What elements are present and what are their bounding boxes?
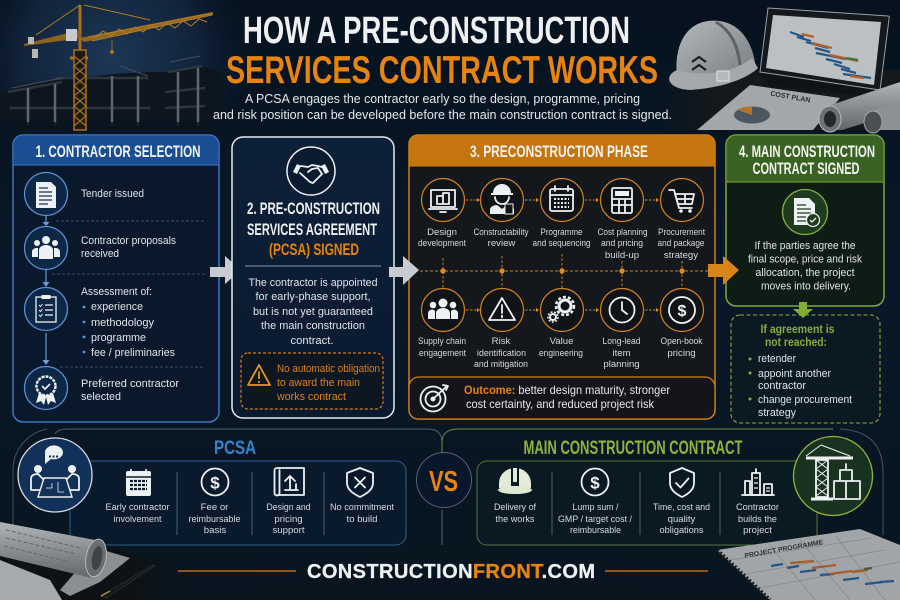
photo: rolled drawings and pen <box>0 522 190 600</box>
header photo: hard hat, laptop, cost plan and drawings: COST PLAN <box>770 91 811 104</box>
icon: calculator <box>600 178 644 222</box>
arrow: step 2 to step 3 <box>389 256 419 285</box>
item: contractor builds the project <box>736 469 780 536</box>
panel: 2. PCSA signed <box>232 137 394 418</box>
icon: calendar <box>540 178 584 222</box>
label: supply chain engagement: Supply chain <box>418 336 466 347</box>
step text: contractor proposals received: received <box>81 248 119 260</box>
step text: assessment criteria: fee / preliminaries <box>91 347 176 359</box>
callout: outcome: cost certainty, and reduced project risk <box>466 397 654 411</box>
panel: main construction contract comparison <box>442 429 883 545</box>
timeline connector <box>415 198 708 312</box>
callout: outcome: Outcome: better design maturity, stronger <box>464 383 670 397</box>
item: contractor builds the project: builds the <box>738 514 777 525</box>
label: risk identification and mitigation: and mitigation <box>474 359 528 370</box>
step text: preferred contractor selected <box>81 378 179 403</box>
icon: clock <box>600 288 644 332</box>
item: no commitment to build: to build <box>347 514 377 525</box>
step text: preferred contractor selected: selected <box>81 391 121 403</box>
step text: tender issued: Tender issued <box>81 188 144 200</box>
heading: PCSA signed: 2. PRE-CONSTRUCTION <box>247 200 380 218</box>
label: risk identification and mitigation: Risk <box>492 336 511 347</box>
panel: 4. main construction contract signed <box>726 135 884 306</box>
photo: project programme notebook: PROJECT PROGRAMME <box>744 539 824 560</box>
item: fee or reimbursable basis: reimbursable <box>188 514 240 525</box>
label: programme and sequencing: and sequencing <box>532 238 590 249</box>
text: appointment explanation <box>248 277 378 347</box>
item: fee or reimbursable basis: basis <box>204 525 226 536</box>
step text: assessment criteria: programme <box>91 332 146 344</box>
label: procurement and package strategy: and package <box>658 238 704 249</box>
panel: 3. preconstruction phase <box>409 135 715 419</box>
text: moves into delivery: final scope, price and risk <box>748 254 862 266</box>
icon: people <box>24 226 68 270</box>
item: fee or reimbursable basis <box>188 468 240 536</box>
icon: signed contract <box>782 190 828 234</box>
step text: preferred contractor selected: Preferred contractor <box>81 378 179 390</box>
icon: risk warning <box>480 288 524 332</box>
label: risk identification and mitigation: identification <box>477 348 526 359</box>
callout: no automatic obligation: No automatic obligation <box>277 363 380 375</box>
step text: assessment criteria <box>81 286 176 359</box>
icon: supply chain people <box>422 288 464 332</box>
label: long-lead item planning <box>602 336 640 370</box>
icon: tender document <box>24 172 68 216</box>
label: long-lead item planning: item <box>612 348 631 359</box>
text: moves into delivery: allocation, the project <box>756 267 855 279</box>
text: appointment explanation: the main construction <box>261 320 365 332</box>
item: fee or reimbursable basis: $ <box>210 474 220 492</box>
callout: no automatic obligation: works contract <box>276 391 346 403</box>
text: moves into delivery: If the parties agree the <box>754 240 856 252</box>
label: constructability review: Constructability <box>474 227 529 238</box>
callout: no automatic obligation <box>241 353 383 409</box>
text: moves into delivery <box>748 240 862 292</box>
callout: if agreement is not reached: change procurement <box>758 394 852 406</box>
label: design development: Design <box>427 227 457 238</box>
VS badge: VS <box>429 466 458 498</box>
item: fee or reimbursable basis: Fee or <box>201 502 229 513</box>
icon: meeting over plans <box>18 438 92 512</box>
item: lump sum pricing options: $ <box>590 474 600 492</box>
header photo: crane and building under construction <box>0 0 270 130</box>
title: SERVICES CONTRACT WORKS <box>226 49 658 92</box>
step text: assessment criteria: Assessment of: <box>81 286 152 298</box>
icon: assessment clipboard <box>24 288 68 330</box>
step text: contractor proposals received: Contractor proposals <box>81 235 177 247</box>
label: supply chain engagement <box>418 336 466 359</box>
title: HOW A PRE-CONSTRUCTION <box>243 10 630 52</box>
label: procurement and package strategy: strategy <box>664 250 698 261</box>
callout: if agreement is not reached: retender <box>758 353 796 365</box>
item: lump sum pricing options: reimbursable <box>570 525 621 536</box>
label: supply chain engagement: engagement <box>419 348 466 359</box>
arrow: down to fallback <box>793 302 813 318</box>
heading: PCSA signed: SERVICES AGREEMENT <box>247 221 377 239</box>
item: design and pricing support: Design and <box>266 502 310 513</box>
text: appointment explanation: The contractor is appointed <box>248 277 378 289</box>
callout: if agreement is not reached: not reached: <box>765 335 827 349</box>
panel: 1. contractor selection <box>13 135 219 422</box>
subtitle: and risk position can be developed before the main construction contract is signed. <box>213 107 672 122</box>
VS badge <box>416 452 472 545</box>
callout: outcome <box>409 377 715 419</box>
label: cost planning and pricing build-up: and pricing <box>601 238 643 249</box>
step text: contractor proposals received <box>81 235 177 260</box>
text: moves into delivery: moves into delivery. <box>761 280 851 292</box>
icon: design development <box>422 178 464 222</box>
icon: shopping cart <box>660 178 704 222</box>
icon: target <box>420 385 448 412</box>
label: value engineering: engineering <box>539 348 583 359</box>
label: procurement and package strategy: Procurement <box>658 227 705 238</box>
label: value engineering: Value <box>550 336 573 347</box>
footer brand: CONSTRUCTIONFRONT.COM <box>307 561 595 583</box>
item: design and pricing support: support <box>272 525 305 536</box>
item: contractor builds the project: project <box>743 525 772 536</box>
callout: if agreement is not reached: appoint another <box>758 368 831 380</box>
item: lump sum pricing options: Lump sum / <box>572 502 619 513</box>
label: cost planning and pricing build-up: build-up <box>605 250 639 261</box>
callout: if agreement is not reached <box>731 315 880 423</box>
label: open-book pricing: pricing <box>667 348 696 359</box>
label: cost planning and pricing build-up <box>598 227 648 261</box>
item: no commitment to build <box>330 468 394 525</box>
panel: PCSA comparison <box>13 429 442 545</box>
label: long-lead item planning: Long-lead <box>602 336 640 347</box>
item: time, cost and quality obligations: Time, cost and <box>653 502 710 513</box>
label: constructability review <box>474 227 529 249</box>
label: constructability review: review <box>488 238 515 249</box>
arrow: step 1 to step 2 <box>210 256 241 284</box>
item: contractor builds the project: Contractor <box>736 502 780 513</box>
heading: PCSA: PCSA <box>214 438 256 459</box>
icon: crane and building <box>794 436 872 516</box>
item: delivery of the works: the works <box>496 514 535 525</box>
item: no commitment to build: No commitment <box>330 502 394 513</box>
label: programme and sequencing: Programme <box>540 227 582 238</box>
icon: handshake <box>287 147 335 195</box>
text: appointment explanation: for early-phase support, <box>256 291 370 303</box>
label: open-book pricing: Open-book <box>660 336 703 347</box>
label: design development <box>418 227 466 249</box>
icon: open-book pricing: $ <box>678 303 687 320</box>
icon: open-book pricing <box>660 288 704 332</box>
icon: gears <box>540 288 584 332</box>
label: procurement and package strategy <box>658 227 705 261</box>
callout: if agreement is not reached: contractor <box>758 380 806 392</box>
item: early contractor involvement <box>106 469 170 525</box>
heading: PCSA signed: (PCSA) SIGNED <box>269 241 359 259</box>
label: programme and sequencing <box>532 227 590 249</box>
subtitle <box>213 91 672 122</box>
icon: warning triangle <box>248 365 270 385</box>
label: value engineering <box>539 336 583 359</box>
item: lump sum pricing options <box>558 468 632 536</box>
callout: no automatic obligation: to award the main <box>277 377 360 389</box>
text: appointment explanation: contract. <box>290 335 334 347</box>
item: time, cost and quality obligations: obligations <box>660 525 704 536</box>
callout: if agreement is not reached: strategy <box>758 407 797 419</box>
label: open-book pricing <box>660 336 703 359</box>
label: long-lead item planning: planning <box>603 359 640 370</box>
heading: PCSA signed <box>247 200 380 259</box>
text: appointment explanation: but is not yet guaranteed <box>253 306 373 318</box>
heading: main construction contract signed <box>739 143 875 178</box>
heading: contractor selection: 1. CONTRACTOR SELECTION <box>36 142 200 161</box>
item: early contractor involvement: Early contractor <box>106 502 170 513</box>
callout: if agreement is not reached: If agreement is <box>760 322 835 336</box>
heading: main construction contract: MAIN CONSTRUCTION CONTRACT <box>524 438 743 459</box>
subtitle: A PCSA engages the contractor early so the design, programme, pricing <box>245 91 640 106</box>
title <box>226 10 658 92</box>
step text: assessment criteria: experience <box>91 301 143 313</box>
item: early contractor involvement: involvement <box>114 514 162 525</box>
icon: constructability review <box>480 178 524 222</box>
item: design and pricing support <box>266 468 310 536</box>
item: delivery of the works: Delivery of <box>494 502 536 513</box>
icon: rosette <box>24 366 68 410</box>
label: cost planning and pricing build-up: Cost planning <box>598 227 648 238</box>
label: design development: development <box>418 238 466 249</box>
photo: project programme notebook <box>717 529 900 600</box>
header photo: hard hat, laptop, cost plan and drawings <box>660 8 900 133</box>
item: time, cost and quality obligations <box>653 468 710 536</box>
step text: assessment criteria: methodology <box>91 317 155 329</box>
label: risk identification and mitigation <box>474 336 528 370</box>
arrow: step 3 to step 4 <box>708 256 739 285</box>
item: time, cost and quality obligations: quality <box>668 514 696 525</box>
item: delivery of the works <box>494 468 536 525</box>
item: lump sum pricing options: GMP / target cost / <box>558 514 632 525</box>
heading: preconstruction phase: 3. PRECONSTRUCTION PHASE <box>470 142 648 161</box>
item: design and pricing support: pricing <box>274 514 303 525</box>
